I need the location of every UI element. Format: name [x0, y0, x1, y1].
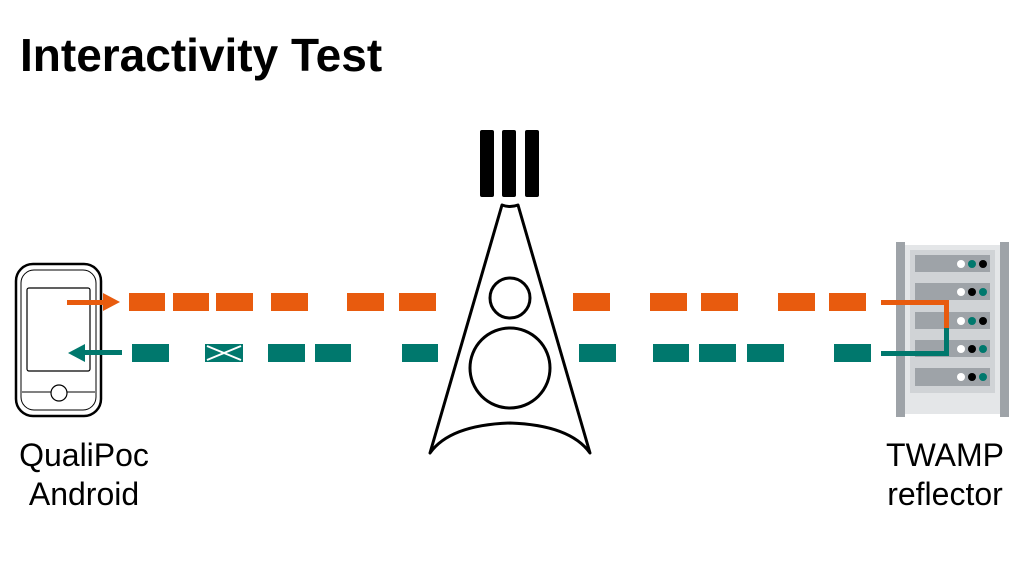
icon: tower	[430, 130, 590, 453]
label: TWAMP reflector	[886, 437, 1004, 512]
icon: phone	[16, 264, 101, 416]
label: TWAMP reflector: reflector	[887, 476, 1003, 512]
lost packet	[205, 344, 243, 362]
label: QualiPoc Android	[19, 437, 149, 512]
label: TWAMP reflector: TWAMP	[886, 437, 1004, 473]
label: QualiPoc Android: Android	[29, 476, 139, 512]
orange outgoing dashes	[67, 293, 949, 328]
icon: server rack	[896, 242, 1009, 417]
teal returning dashes	[68, 328, 949, 362]
label: QualiPoc Android: QualiPoc	[19, 437, 149, 473]
title: Interactivity Test	[20, 29, 382, 81]
